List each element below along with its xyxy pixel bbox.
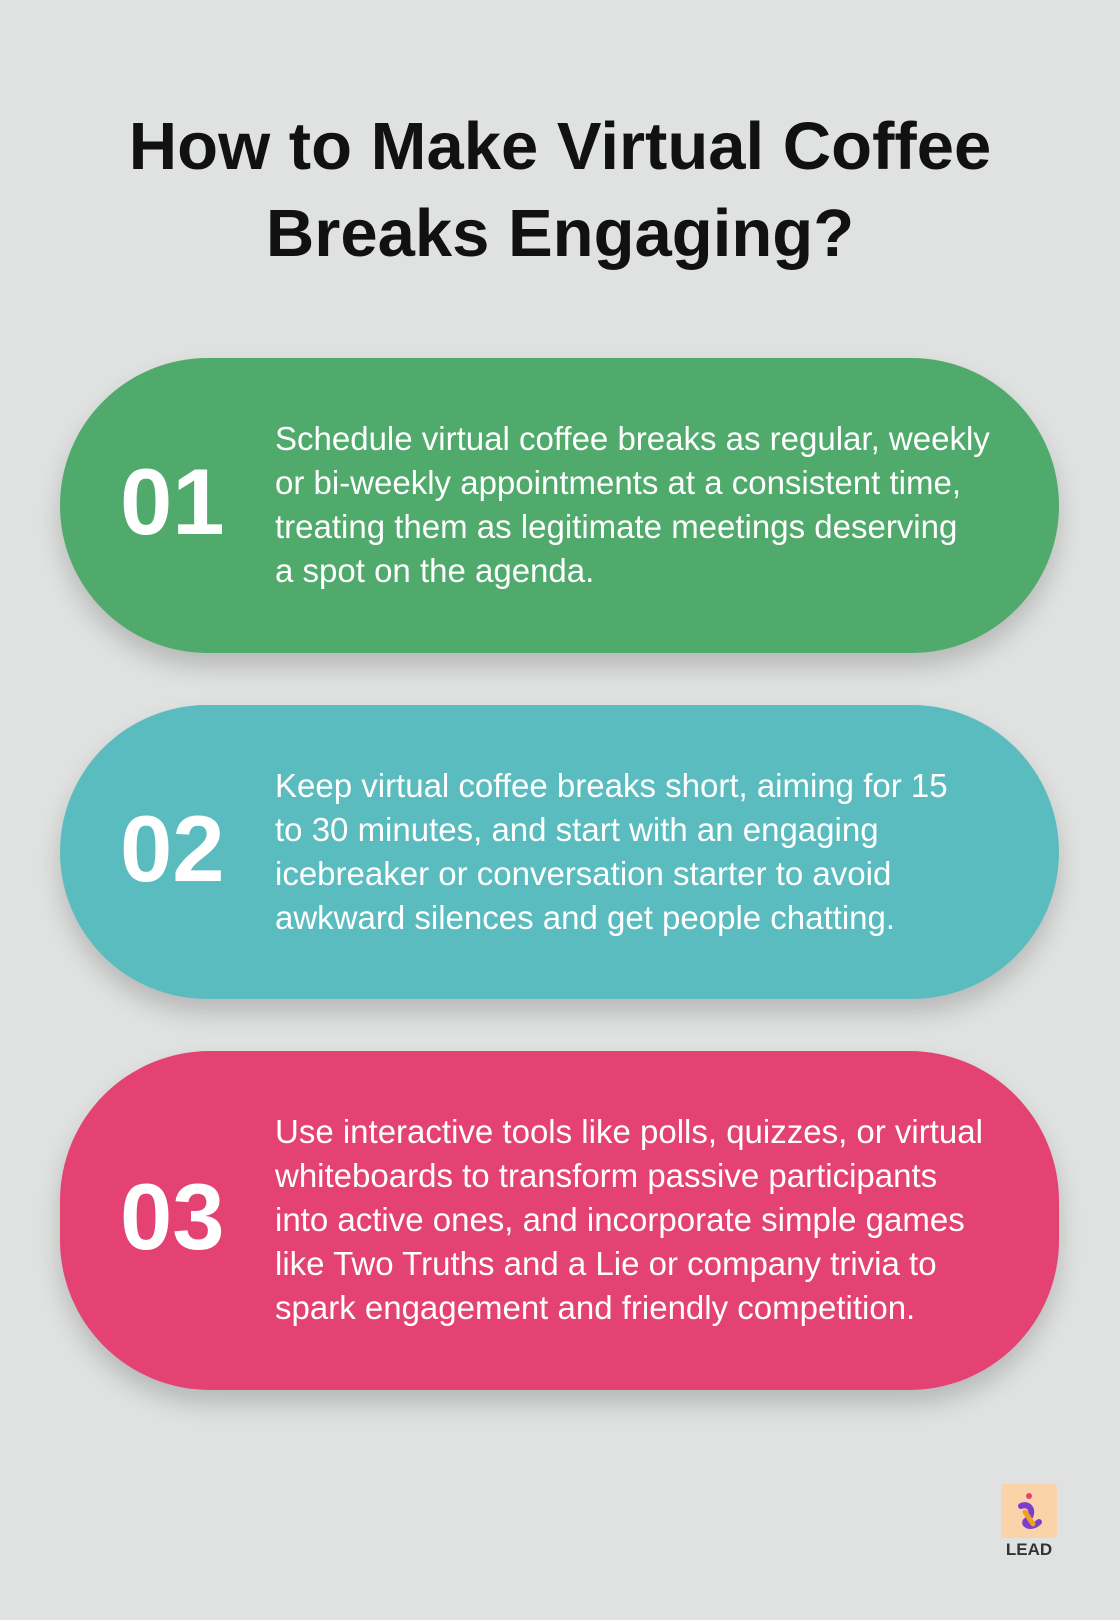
logo text: LEAD [1006, 1540, 1052, 1559]
text 03: like Two Truths and a Lie or company trivia to [275, 1245, 937, 1282]
title: Breaks Engaging? [266, 196, 854, 271]
icon: logo mark [1001, 1484, 1057, 1538]
number 01: 01 [120, 449, 225, 554]
text 01: a spot on the agenda. [275, 552, 594, 589]
text 02: Keep virtual coffee breaks short, aiming for 15 [275, 767, 948, 804]
text 02: awkward silences and get people chatting. [275, 899, 895, 936]
title: How to Make Virtual Coffee [129, 109, 991, 184]
text 02: icebreaker or conversation starter to avoid [275, 855, 891, 892]
number 03: 03 [120, 1164, 225, 1269]
text 03: into active ones, and incorporate simple games [275, 1201, 965, 1238]
panel: step 02 [60, 705, 1059, 999]
text 03: whiteboards to transform passive participants [275, 1157, 937, 1194]
panel: step 01 [60, 358, 1059, 653]
text 01: or bi-weekly appointments at a consistent time, [275, 464, 961, 501]
text 03: Use interactive tools like polls, quizzes, or virtual [275, 1113, 983, 1150]
text 03: spark engagement and friendly competition. [275, 1289, 915, 1326]
text 02 [275, 767, 948, 936]
title [129, 109, 991, 271]
text 01: Schedule virtual coffee breaks as regular, weekly [275, 420, 990, 457]
text 01 [275, 420, 990, 589]
text 01: treating them as legitimate meetings deserving [275, 508, 957, 545]
panel: step 03 [60, 1051, 1059, 1390]
text 02: to 30 minutes, and start with an engaging [275, 811, 879, 848]
number 02: 02 [120, 796, 225, 901]
text 03 [275, 1113, 983, 1326]
logo [1001, 1484, 1057, 1559]
